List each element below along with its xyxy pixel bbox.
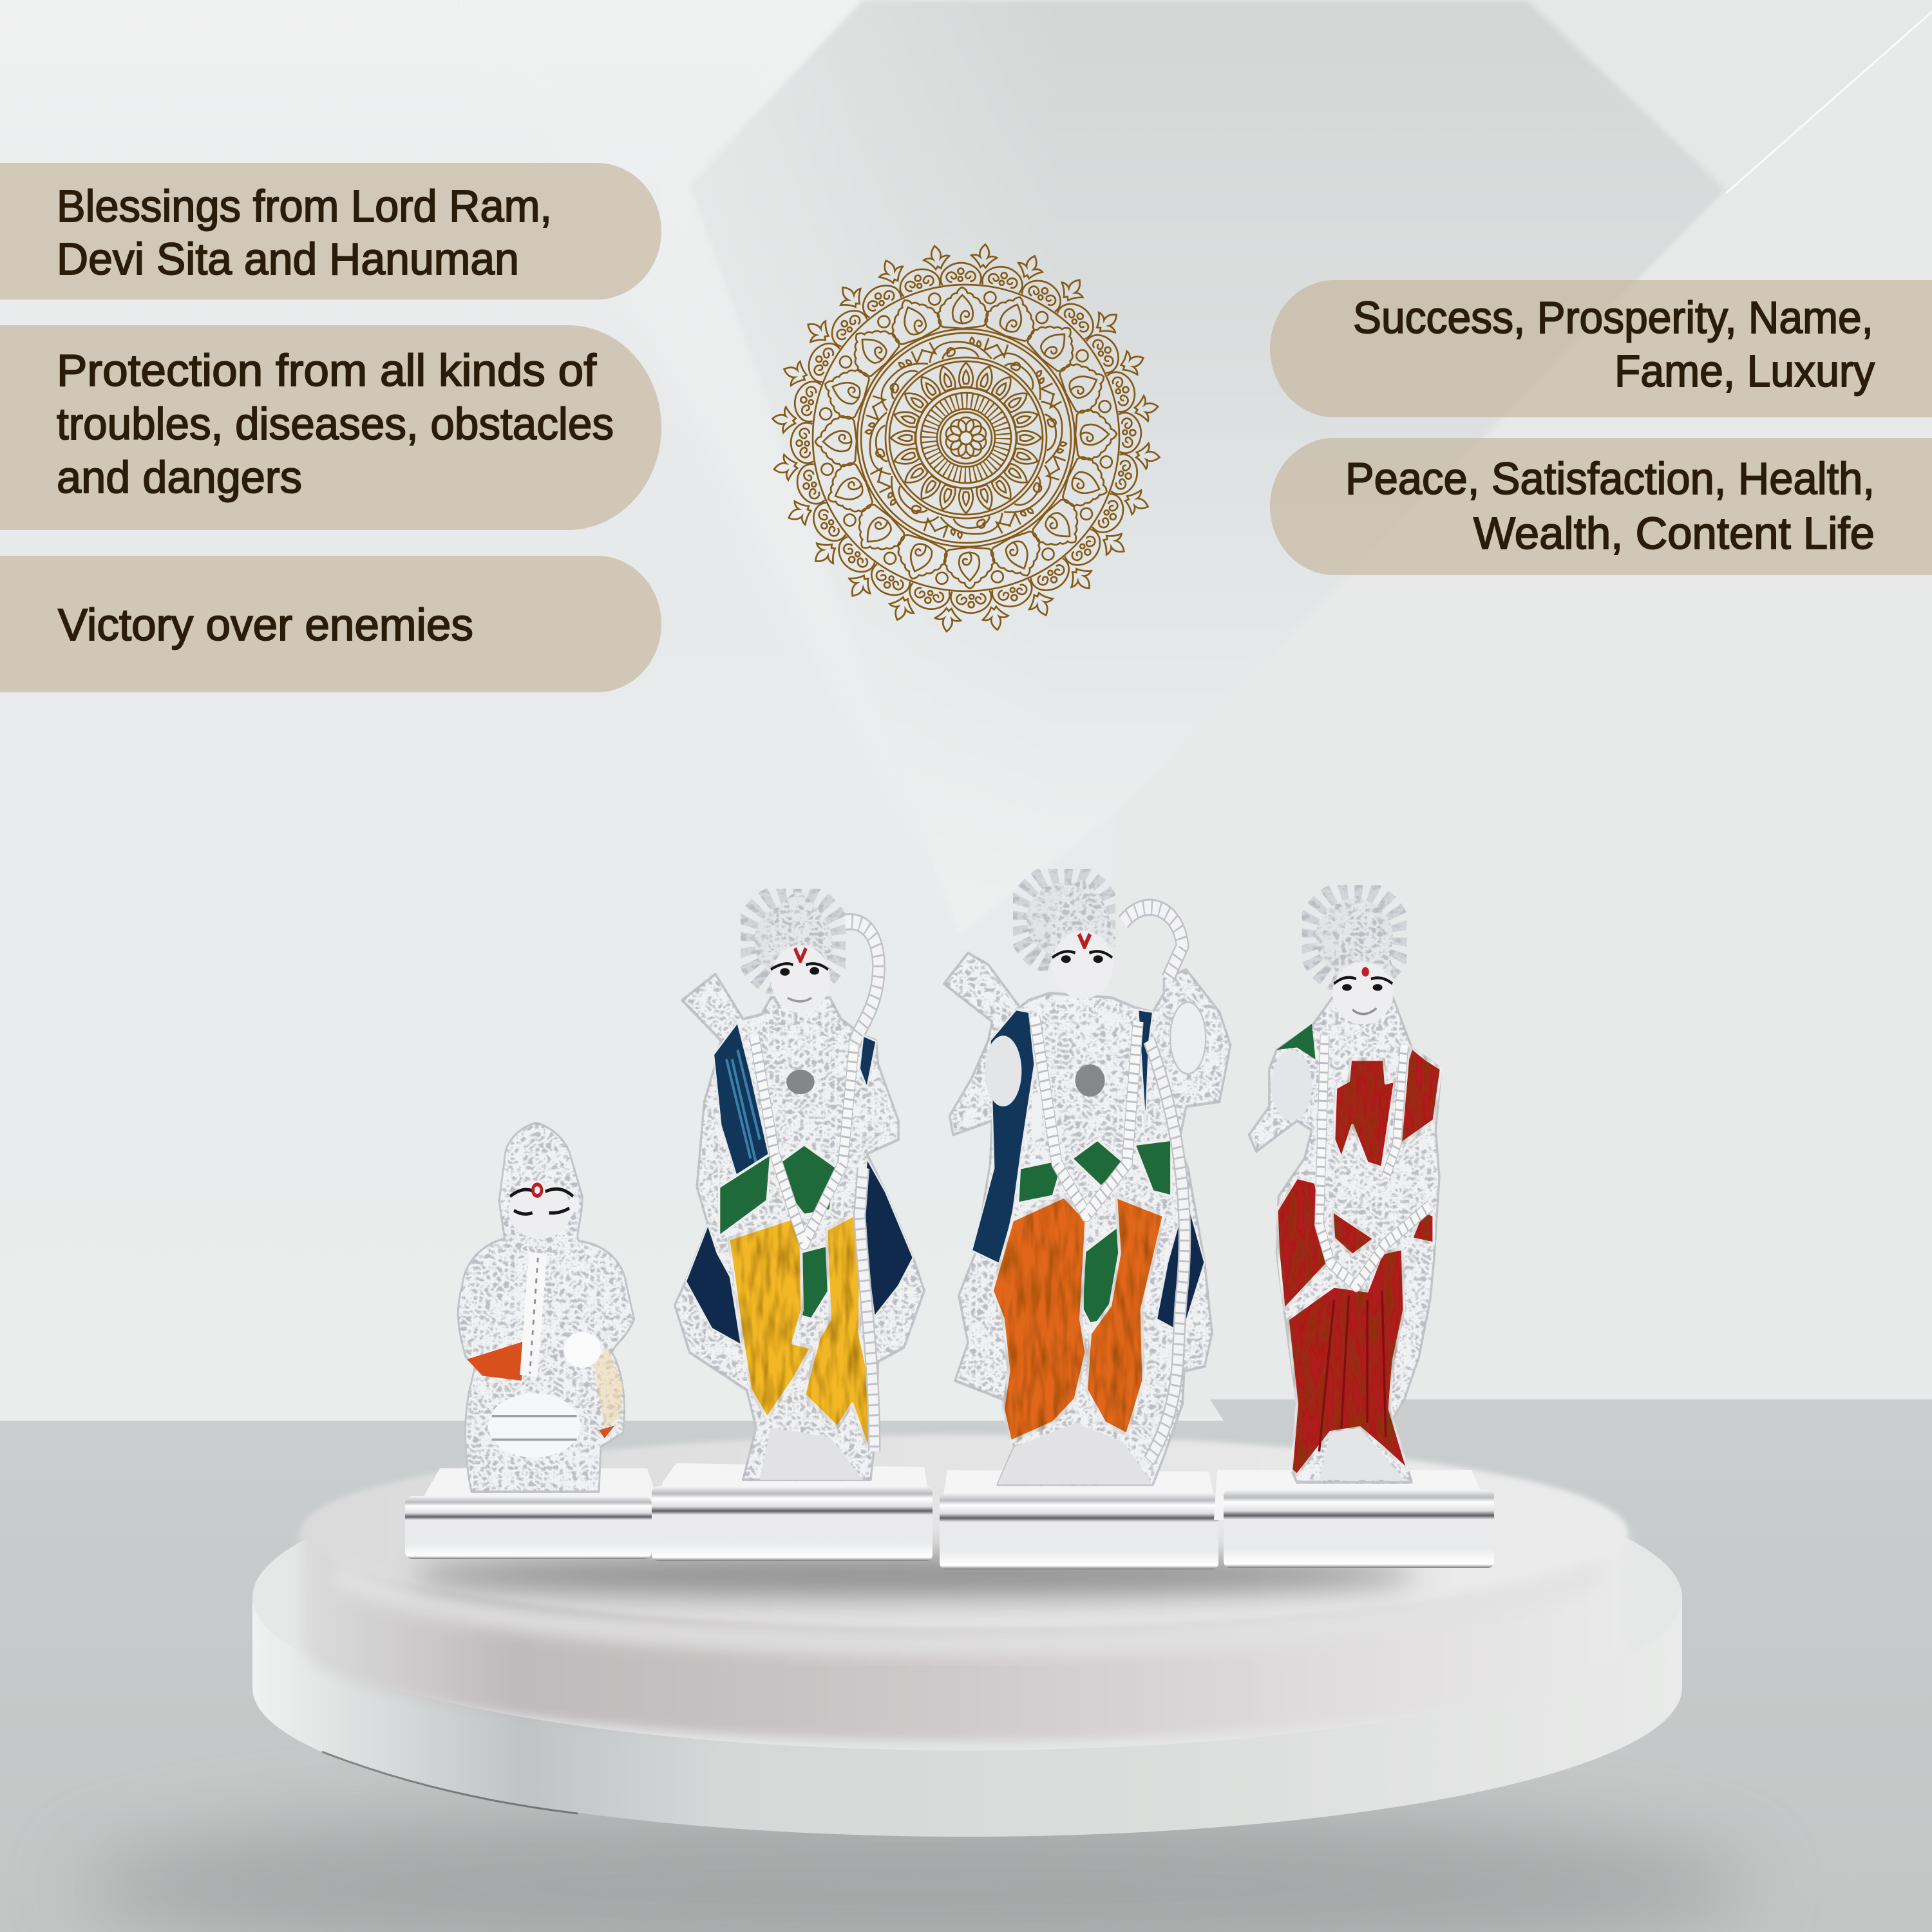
panel: right benefit pills <box>1270 280 1932 575</box>
sari red <box>1276 1047 1441 1475</box>
pill: peace: Peace, Satisfaction, Health, <box>1345 453 1875 504</box>
background wall <box>0 0 1932 1481</box>
icon: gold mandala <box>762 234 1170 642</box>
podium upper disc <box>301 1435 1627 1741</box>
dhoti orange <box>992 1197 1164 1442</box>
pill: victory: Victory over enemies <box>58 600 473 650</box>
figure: Lakshman <box>675 891 924 1480</box>
figure: Ram <box>944 873 1231 1484</box>
pill: victory <box>0 556 661 692</box>
statue: Ram and Sita <box>944 873 1441 1484</box>
panel: left benefit pills <box>0 163 661 692</box>
pill: blessings: Blessings from Lord Ram, <box>57 181 552 231</box>
base: Ram <box>940 1470 1218 1569</box>
pill: protection: Protection from all kinds of <box>57 345 597 395</box>
figure: Sita <box>1249 890 1441 1482</box>
sash green <box>1018 1140 1171 1324</box>
pill: peace <box>1270 438 1932 575</box>
dhoti yellow <box>728 1211 876 1452</box>
shawl blue <box>972 1010 1204 1333</box>
halo <box>1018 873 1110 966</box>
base: Hanuman <box>405 1468 661 1559</box>
figure: Hanuman <box>458 1123 634 1492</box>
halo <box>745 893 840 989</box>
base: Sita <box>1214 1470 1494 1568</box>
halo <box>1307 890 1402 985</box>
pill: blessings <box>0 163 661 299</box>
sash green <box>719 1144 837 1319</box>
pill: blessings: Devi Sita and Hanuman <box>57 234 519 284</box>
pill: peace: Wealth, Content Life <box>1473 508 1875 558</box>
pill: success <box>1270 280 1932 417</box>
shawl blue <box>686 1023 913 1345</box>
pill: success: Success, Prosperity, Name, <box>1353 292 1873 343</box>
statue bases <box>405 1463 1494 1569</box>
podium lower disc <box>252 1444 1682 1837</box>
pill: protection <box>0 325 661 530</box>
pill: success: Fame, Luxury <box>1615 346 1875 396</box>
podium <box>252 1435 1682 1837</box>
statue: Hanuman and Lakshman <box>458 891 924 1492</box>
pill: protection: troubles, diseases, obstacles <box>57 399 614 449</box>
floor shadow <box>77 1803 1752 1932</box>
crown <box>767 891 834 955</box>
pill: protection: and dangers <box>57 452 302 502</box>
crown <box>1049 880 1116 946</box>
garland <box>1319 1036 1430 1286</box>
floor <box>0 1399 1932 1932</box>
crown <box>1334 898 1393 974</box>
base: Lakshman <box>652 1463 933 1561</box>
garland <box>754 1036 854 1244</box>
garland <box>1034 1017 1138 1215</box>
